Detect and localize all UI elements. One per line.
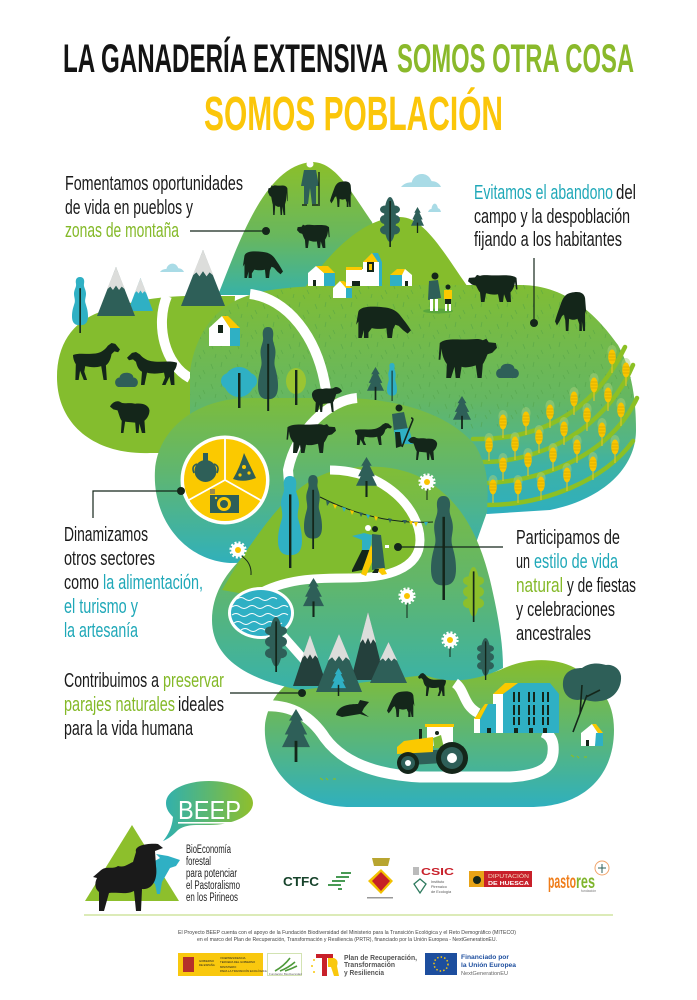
logo tagline: en los Pirineos: [186, 892, 238, 904]
logo tagline: [186, 844, 240, 904]
house left: [209, 316, 240, 346]
dancing couple: [352, 525, 389, 576]
road on left hill: [162, 296, 190, 378]
logo: Gobierno de España: MINISTERIO: [220, 965, 237, 969]
logo: municipal crest: [367, 858, 393, 898]
field grass ticks: [190, 285, 634, 430]
BEEP logo: [85, 781, 253, 911]
trees upper left: [72, 277, 519, 411]
funding statement: en el marco del Plan de Recuperación, Transformación y Resiliencia (PRTR), financiado por la Unión Europea - NextGenerationEU.: [197, 937, 497, 943]
callout text: la alimentación,: [103, 571, 203, 594]
callout text: [65, 172, 243, 242]
logo: CSIC: Pirenaico: [431, 885, 447, 889]
logo: European Union: la Unión Europea: [461, 962, 516, 969]
right upper trees: [380, 197, 424, 247]
logo: Gobierno de España: PARA LA TRANSICIÓN ECOLÓGICA: [220, 968, 267, 973]
village houses: [308, 253, 412, 298]
central mountain group: [293, 612, 407, 696]
title line 1 black: LA GANADERÍA EXTENSIVA: [63, 36, 388, 81]
title: [63, 36, 634, 141]
small house right: [581, 724, 603, 746]
logo: Pastores: res: [576, 872, 595, 893]
lime meadow lobe: [222, 472, 418, 595]
goats and sheep left: [73, 343, 177, 433]
callout text: ancestrales: [516, 622, 591, 645]
upper right road: [455, 683, 478, 713]
logo: Pastores: pasto: [548, 872, 576, 893]
callout text: ideales: [178, 693, 224, 716]
cows on the big field: [356, 275, 586, 378]
callout: natural places: [64, 669, 306, 740]
daisies: [231, 475, 457, 657]
logo triangle: [85, 825, 179, 901]
divider line: [84, 914, 613, 916]
callout text: parajes naturales: [64, 693, 175, 716]
left hill with goats: [57, 296, 235, 453]
illustrated landscape map: [57, 160, 637, 807]
logo: CSIC: Instituto: [431, 880, 444, 884]
connector line: [93, 487, 185, 518]
lamb and running calf: [286, 387, 342, 453]
logo: Gobierno de España: TERCERA DEL GOBIERNO: [220, 960, 256, 964]
connector line: [394, 543, 503, 551]
callout text: Fomentamos oportunidades: [65, 172, 243, 195]
logo: CSIC: CSIC: [421, 866, 455, 878]
funder logos: [178, 953, 516, 977]
callout text: estilo de vida: [534, 550, 618, 573]
funding statement: [178, 930, 516, 943]
bottom grass marks: [320, 755, 587, 780]
large field: [190, 285, 636, 514]
lake exit road: [283, 636, 306, 662]
callout text: la artesanía: [64, 619, 138, 642]
shepherd, dog and sheep: [355, 404, 437, 460]
callout text: Evitamos el abandono: [474, 181, 613, 204]
icon: jug: [193, 453, 218, 482]
connector line: [230, 689, 306, 697]
connector road: [288, 398, 357, 495]
main road: [250, 294, 327, 398]
title line 2 yellow: SOMOS POBLACIÓN: [204, 86, 503, 141]
icon: cheese: [233, 453, 256, 481]
callout text: [474, 181, 636, 251]
logo: Plan de Recuperación: Transformación: [344, 962, 395, 969]
callout text: otros sectores: [64, 547, 155, 570]
tree right: [563, 663, 621, 732]
callout text: como: [64, 571, 99, 594]
logo: Plan de Recuperación: y Resiliencia: [344, 970, 384, 977]
bottom pine: [282, 709, 310, 762]
callout text: del: [616, 181, 636, 204]
logo: CSIC: [413, 866, 455, 894]
black sheep: [93, 844, 163, 911]
center lobe with products circle: [155, 398, 488, 563]
tall mountain: [218, 162, 395, 295]
callout text: fijando a los habitantes: [474, 228, 622, 251]
logo: CSIC: de Ecología: [431, 890, 452, 894]
logo: Diputación de Huesca: [469, 871, 532, 887]
logo: Gobierno de España: DE ESPAÑA: [199, 962, 215, 967]
wheat strips: [473, 347, 637, 505]
woman and child: [423, 272, 453, 314]
callout: mountain villages: [65, 172, 270, 242]
callout text: [64, 523, 203, 642]
lake: [228, 587, 294, 639]
winding road in column: [262, 470, 420, 592]
middle column blob: [212, 467, 503, 690]
farm building: [474, 683, 559, 733]
logo: Gobierno de España: VICEPRESIDENCIA: [220, 956, 246, 960]
lower animals: [336, 673, 446, 717]
farmer: [301, 160, 319, 206]
logo: Plan de Recuperación: Plan de Recuperación,: [344, 955, 417, 962]
callout text: campo y la despoblación: [474, 205, 630, 228]
products circle: [180, 436, 270, 524]
logo: Diputación de Huesca: DE HUESCA: [488, 881, 529, 887]
logo: Gobierno de España: [178, 953, 267, 976]
animals on tall mountain: [243, 181, 352, 278]
callout text: de vida en pueblos y: [65, 196, 194, 219]
callout text: zonas de montaña: [65, 219, 179, 242]
icon: camera: [210, 489, 239, 513]
logo tagline: para potenciar: [186, 868, 237, 880]
BEEP wordmark: BEEP: [178, 795, 241, 825]
logo: European Union: [425, 953, 516, 977]
logo: Fundación Biodiversidad: [268, 954, 302, 976]
festive bunting: [320, 497, 433, 527]
field pines: [356, 363, 471, 497]
callout text: [516, 526, 636, 645]
logo tagline: el Pastoralismo: [186, 880, 240, 892]
funding statement: El Proyecto BEEP cuenta con el apoyo de la Fundación Biodiversidad del Ministerio para la Transición Ecológica y el Reto Demográfico (MITECO): [178, 930, 516, 936]
column trees: [265, 475, 494, 680]
logo: CTFC: [283, 873, 351, 889]
connector line: [530, 258, 538, 327]
callout text: y celebraciones: [516, 598, 615, 621]
callout text: un: [516, 550, 530, 573]
logo: CTFC: CTFC: [283, 875, 319, 889]
callout: other sectors: [64, 487, 203, 642]
logo: Plan de Recuperación: [311, 954, 417, 977]
callout text: Contribuimos a: [64, 669, 159, 692]
bottom road: [262, 706, 553, 777]
callout text: y de fiestas: [567, 574, 636, 597]
logo: European Union: NextGenerationEU: [461, 971, 508, 977]
logo: European Union: Financiado por: [461, 954, 509, 961]
logo tagline: forestal: [186, 856, 211, 868]
speech bubble: [163, 781, 253, 841]
callout text: natural: [516, 574, 563, 597]
logo: Pastores: fundación: [581, 889, 596, 893]
wordmark underline: [178, 822, 241, 824]
logo: Fundación Biodiversidad: Fundación Biodiversidad: [269, 972, 302, 976]
logo: Diputación de Huesca: DIPUTACIÓN: [488, 873, 529, 880]
callout: depopulation: [474, 181, 636, 327]
wheat plants: [484, 345, 631, 503]
callout text: [64, 669, 224, 740]
teal cow: [152, 854, 180, 894]
tractor: [397, 724, 468, 774]
logo: Pastores: [548, 861, 609, 893]
callout: natural lifestyle: [394, 526, 636, 645]
callout text: Participamos de: [516, 526, 620, 549]
partner logos: [283, 858, 609, 898]
callout text: el turismo y: [64, 595, 139, 618]
bottom blob: [265, 660, 614, 807]
mountains top left: [97, 250, 225, 316]
connector line: [190, 227, 270, 235]
callout text: Dinamizamos: [64, 523, 148, 546]
callout text: preservar: [163, 669, 224, 692]
logo: Gobierno de España: GOBIERNO: [199, 959, 215, 963]
second hill: [300, 217, 470, 300]
clouds: [160, 174, 441, 272]
logo tagline: BioEconomía: [186, 844, 231, 856]
callout text: para la vida humana: [64, 717, 193, 740]
